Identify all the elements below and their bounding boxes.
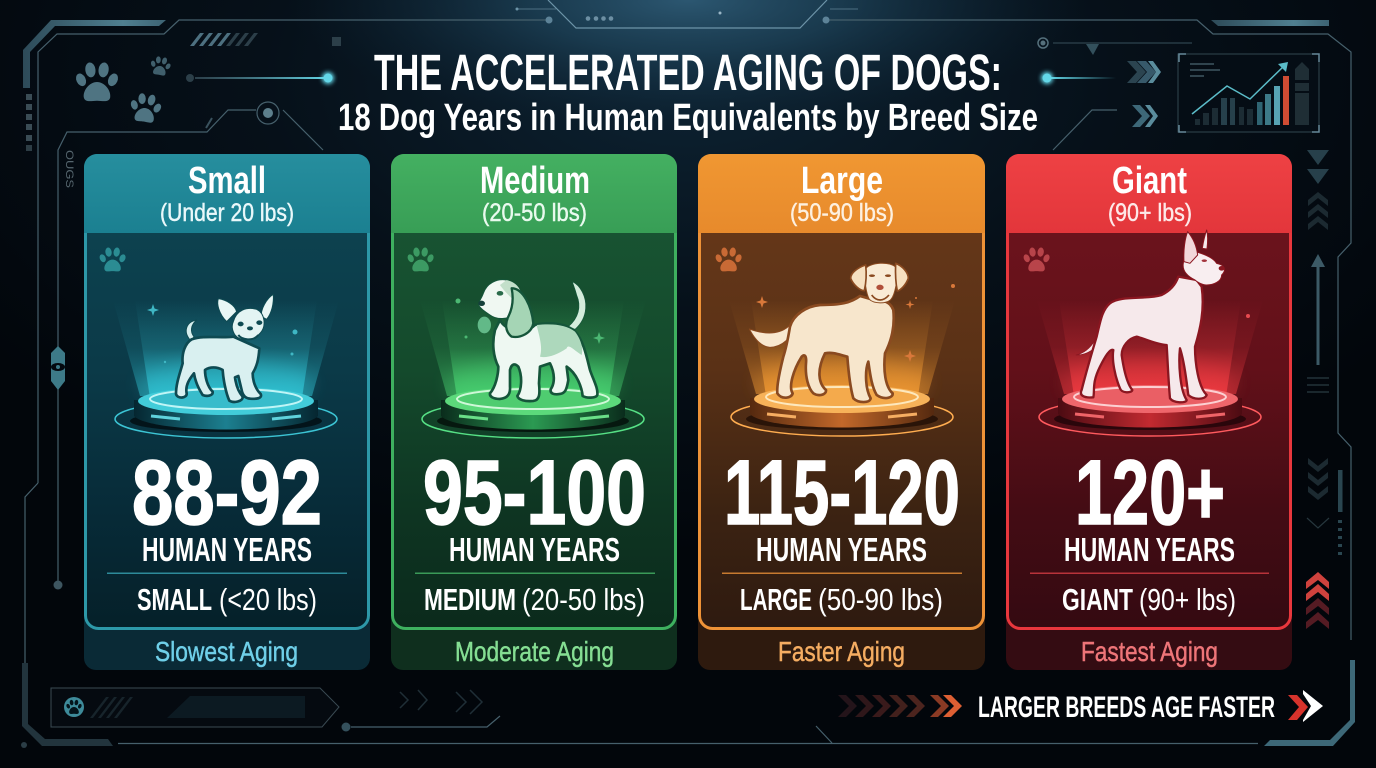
icon: paw <box>714 247 743 271</box>
size label: (90+ lbs) <box>1139 582 1236 617</box>
sparkle <box>1246 314 1250 318</box>
spotlight and platform <box>1037 300 1263 436</box>
title line 1: THE ACCELERATED AGING OF DOGS: <box>374 44 1002 101</box>
right side indicators <box>1306 150 1342 629</box>
spotlight and platform <box>729 300 955 436</box>
size label: (<20 lbs) <box>219 582 317 617</box>
arrow: double chevron <box>1288 690 1323 722</box>
header band <box>84 154 370 233</box>
breed heading: Medium <box>480 160 590 202</box>
header band <box>698 154 985 233</box>
header band <box>1006 154 1292 233</box>
side label: OUGS <box>63 150 75 188</box>
weight range: (50-90 lbs) <box>790 199 894 227</box>
aging rate: Slowest Aging <box>155 636 298 667</box>
aging rate: Moderate Aging <box>455 636 614 667</box>
stat: human years value: 115-120 <box>724 442 960 544</box>
weight range: (Under 20 lbs) <box>160 199 294 227</box>
sparkles <box>456 298 605 344</box>
arrow trail <box>838 695 962 717</box>
size label: LARGE <box>740 582 812 617</box>
panel: small <box>84 154 370 670</box>
header band <box>391 154 677 233</box>
stat label: HUMAN YEARS <box>1064 531 1235 568</box>
chevrons top right <box>1127 61 1161 127</box>
footer tab <box>698 610 985 670</box>
card body <box>700 156 984 628</box>
icon: paw <box>98 247 127 271</box>
card body <box>392 156 676 628</box>
weight range: (20-50 lbs) <box>482 199 587 227</box>
weight range: (90+ lbs) <box>1108 199 1192 227</box>
size label: GIANT <box>1062 582 1133 617</box>
card body <box>1008 156 1290 628</box>
bottom left status bar <box>51 688 832 743</box>
panel: giant <box>1006 154 1292 670</box>
spotlight and platform <box>420 300 646 438</box>
stat: human years value: 120+ <box>1075 442 1225 544</box>
callout: larger breeds age faster <box>838 690 1323 724</box>
breed heading: Small <box>188 160 266 202</box>
stat label: HUMAN YEARS <box>756 531 927 568</box>
stat: human years value: 88-92 <box>132 442 322 544</box>
card body <box>86 156 368 628</box>
footer tab <box>84 610 370 670</box>
size label <box>137 582 317 617</box>
illustration: small dog <box>176 294 273 402</box>
icon: paw <box>406 247 435 271</box>
footer tab <box>391 610 677 670</box>
size label: (20-50 lbs) <box>522 582 645 617</box>
aging rate: Fastest Aging <box>1081 636 1218 667</box>
breed heading: Giant <box>1112 160 1187 202</box>
size label: (50-90 lbs) <box>818 582 943 617</box>
panel: large <box>698 154 985 670</box>
connector line left <box>186 72 334 84</box>
title <box>338 44 1038 139</box>
stat: human years value: 95-100 <box>423 442 646 544</box>
icon: paw badge <box>64 697 84 717</box>
paw prints top left <box>74 55 173 124</box>
breed heading: Large <box>801 160 883 202</box>
icon: growth chart <box>1178 54 1319 132</box>
size label <box>424 582 645 617</box>
subtitle line: 18 Dog Years in Human Equivalents by Breed Size <box>338 97 1038 139</box>
illustration: large dog <box>749 263 908 402</box>
size label: SMALL <box>137 582 212 617</box>
illustration: medium dog <box>478 280 597 401</box>
aging rate: Faster Aging <box>778 636 905 667</box>
icon: paw <box>1022 247 1051 271</box>
sparkles <box>756 284 955 362</box>
size label <box>740 582 943 617</box>
size label: MEDIUM <box>424 582 516 617</box>
illustration: giant dog <box>1076 230 1225 402</box>
footer tab <box>1006 610 1292 670</box>
stat label: HUMAN YEARS <box>449 531 620 568</box>
sparkles <box>147 304 298 363</box>
panel: medium <box>391 154 677 670</box>
stat label: HUMAN YEARS <box>142 531 312 568</box>
connector line right <box>1041 72 1116 84</box>
spotlight and platform <box>113 300 339 438</box>
size label <box>1062 582 1236 617</box>
